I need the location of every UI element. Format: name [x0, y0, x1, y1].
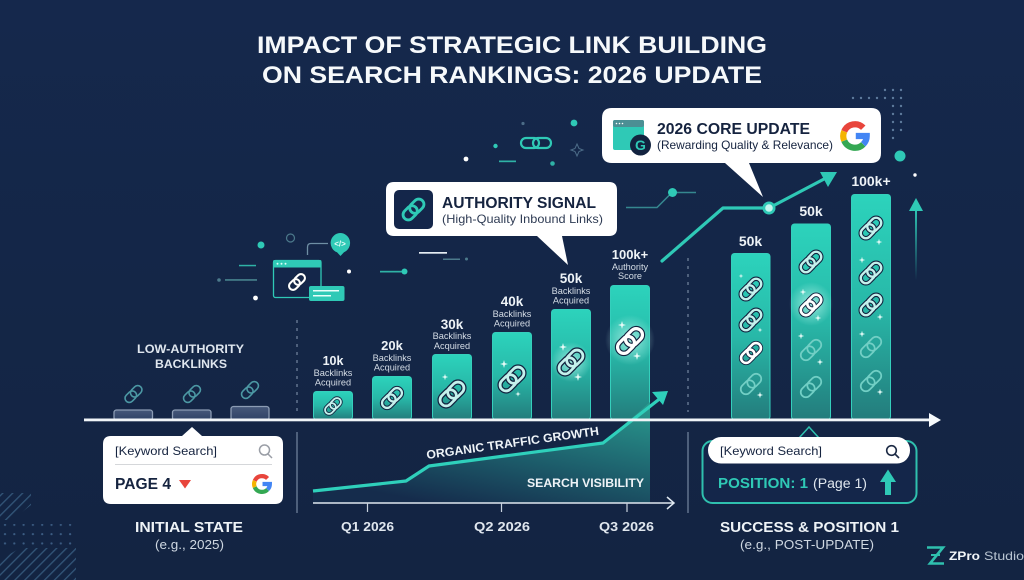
bar: 100k+: 100k+	[851, 173, 891, 189]
bar: 100k+ authority score: Authority	[612, 262, 649, 272]
icon: link in dark square	[394, 190, 433, 229]
decorative cluster: top dots and particles	[852, 89, 917, 177]
panel: position 1 search result	[702, 427, 916, 503]
callout: 2026 core update	[602, 108, 881, 197]
chart: organic traffic growth: ORGANIC TRAFFIC GROWTH	[425, 424, 600, 462]
bar: 10k backlinks: Backlinks	[314, 368, 353, 378]
quarter axis: Q1 2026	[341, 519, 394, 534]
panel: position 1 search result: POSITION: 1	[718, 475, 808, 492]
logo: ZPro Studio	[927, 548, 1024, 564]
callout: 2026 core update: (Rewarding Quality & Relevance)	[657, 138, 833, 152]
icon: Google G	[254, 476, 270, 492]
icon: Google G	[843, 124, 867, 148]
panel: initial search result: PAGE 4	[115, 476, 171, 493]
panel: initial search result	[103, 427, 283, 504]
quarter axis: Q3 2026	[599, 519, 654, 534]
vertical section dividers	[297, 432, 688, 513]
bar: 30k backlinks: Backlinks	[433, 331, 472, 341]
logo: ZPro Studio: Studio	[984, 549, 1024, 563]
chart: organic traffic growth	[313, 391, 668, 503]
title: ON SEARCH RANKINGS: 2026 UPDATE	[262, 62, 762, 89]
bar: 30k backlinks: 30k	[441, 317, 464, 332]
title	[257, 32, 767, 89]
bar: 10k backlinks: Acquired	[315, 378, 351, 388]
bar: 20k backlinks: Acquired	[374, 362, 410, 372]
heading: low-authority backlinks: BACKLINKS	[155, 357, 227, 371]
decorative hatch and dot texture	[0, 493, 76, 580]
bar: 40k backlinks: 40k	[501, 294, 524, 309]
heading: low-authority backlinks: LOW-AUTHORITY	[137, 342, 244, 356]
logo: ZPro Studio: ZPro	[949, 549, 980, 563]
update node on growth line	[762, 202, 776, 214]
heading: success and position 1	[720, 520, 899, 552]
bar: 30k backlinks	[432, 317, 472, 420]
callout: authority signal: (High-Quality Inbound Links)	[442, 212, 603, 226]
bar: 50k: 50k	[799, 203, 823, 219]
bar: 20k backlinks: 20k	[381, 338, 404, 353]
heading: success and position 1: (e.g., POST-UPDATE)	[740, 537, 874, 552]
heading: initial state: INITIAL STATE	[135, 520, 243, 536]
icon: browser window with link and code bubble	[217, 233, 350, 301]
bar: 50k backlinks: 50k	[560, 271, 583, 286]
arrow: upward trend	[909, 198, 923, 280]
low-authority bars with faded link icons	[114, 380, 269, 420]
bar: 50k backlinks: Acquired	[553, 296, 589, 306]
bar: 100k+	[851, 173, 891, 420]
icon: browser with G badge	[613, 120, 651, 156]
chart: organic traffic growth: SEARCH VISIBILITY	[527, 476, 644, 490]
quarter axis: Q2 2026	[474, 519, 530, 534]
bar: 100k+ authority score: 100k+	[612, 247, 649, 262]
bar: 20k backlinks: Backlinks	[373, 353, 412, 363]
bar chart: post-update backlink bars	[732, 173, 891, 420]
bar chart: backlinks by quarter	[314, 247, 655, 420]
bar: 50k backlinks	[551, 271, 591, 420]
bar: 10k backlinks: 10k	[323, 354, 343, 368]
icon: horizontal link with particles	[464, 120, 583, 166]
decorative particles near authority callout	[347, 252, 468, 274]
title: IMPACT OF STRATEGIC LINK BUILDING	[257, 32, 767, 59]
heading: initial state: (e.g., 2025)	[155, 537, 224, 552]
bar: 10k backlinks	[314, 354, 353, 420]
bar: 40k backlinks: Acquired	[494, 318, 530, 328]
bar: 50k backlinks: Backlinks	[552, 286, 591, 296]
panel: position 1 search result: (Page 1)	[813, 476, 867, 491]
dashed dividers	[297, 258, 688, 412]
growth arrow line above bars	[662, 172, 837, 261]
icon: search	[260, 445, 272, 458]
callout: 2026 core update: 2026 CORE UPDATE	[657, 121, 810, 138]
heading: success and position 1: SUCCESS & POSITION 1	[720, 520, 899, 536]
quarter axis	[313, 497, 674, 534]
bar: 50k: 50k	[739, 233, 762, 249]
panel: position 1 search result: [Keyword Search]	[720, 444, 822, 458]
bar: 100k+ authority score	[605, 247, 655, 420]
bar: 50k	[732, 233, 770, 420]
icon: up arrow	[880, 470, 896, 495]
main timeline axis	[84, 413, 941, 427]
icon: red down triangle	[179, 480, 191, 488]
bar: 40k backlinks: Backlinks	[493, 309, 532, 319]
panel: initial search result: [Keyword Search]	[115, 444, 217, 458]
heading: initial state	[135, 520, 243, 552]
bar: 40k backlinks	[492, 294, 532, 420]
bar: 50k	[789, 203, 833, 420]
heading: low-authority backlinks	[137, 342, 244, 371]
bar: 100k+ authority score: Score	[618, 271, 642, 281]
icon: search dark	[887, 446, 899, 458]
bar: 30k backlinks: Acquired	[434, 341, 470, 351]
icon: browser with G badge: G	[635, 137, 646, 153]
callout: authority signal: AUTHORITY SIGNAL	[442, 195, 596, 212]
connector with node near core update	[626, 188, 696, 208]
bar: 20k backlinks	[372, 338, 412, 420]
icon: browser window with link and code bubble: </>	[334, 240, 346, 248]
callout: authority signal	[386, 182, 617, 265]
